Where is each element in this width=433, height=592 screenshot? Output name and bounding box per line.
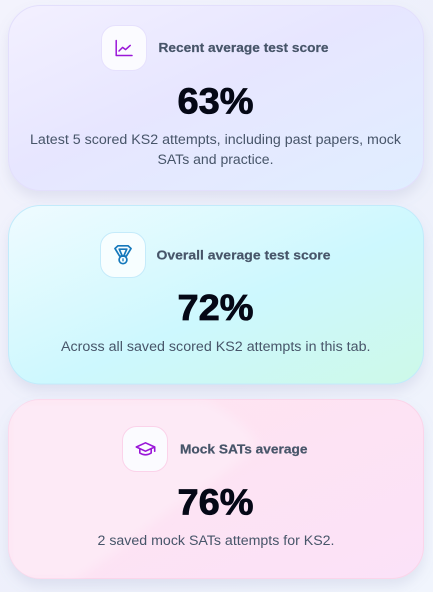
heading: overall average test score: Overall average test score [156,248,330,262]
value: 72%: 72% [178,287,254,328]
panel: recent average test score [8,6,424,190]
icon: medal [100,232,146,278]
description: mock SATs: 2 saved mock SATs attempts for KS2. [98,533,334,548]
description: overall score: Across all saved scored KS2 attempts in this tab. [61,339,370,354]
panel: mock SATs average [8,400,424,580]
icon: graduation cap [122,426,168,472]
heading: recent average test score: Recent average test score [158,40,328,55]
value: 76%: 76% [178,482,254,522]
icon: line chart [102,26,146,70]
value: 63%: 63% [178,80,254,122]
description: recent score: SATs and practice. [158,152,274,167]
description: recent score [30,132,401,167]
description: recent score: Latest 5 scored KS2 attempts, including past papers, mock [30,132,401,147]
heading: mock SATs average: Mock SATs average [180,442,308,456]
panel: overall average test score [8,206,424,384]
